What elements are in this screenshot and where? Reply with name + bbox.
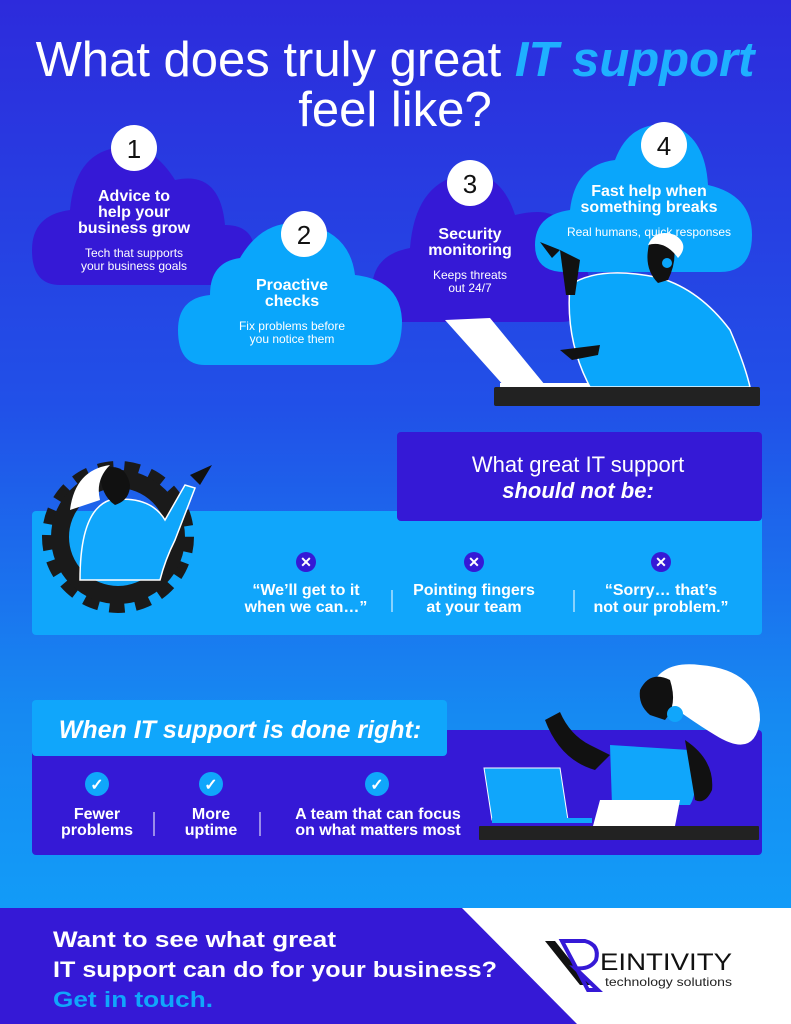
item 2	[413, 552, 535, 616]
title: feel like?	[298, 83, 492, 137]
item 2: Pointing fingers	[413, 582, 535, 599]
illustration: woman with headset	[479, 664, 760, 840]
done right panel	[32, 700, 762, 855]
check 1: Fewer	[74, 806, 120, 823]
cloud 3: security: Keeps threats	[433, 268, 507, 282]
cloud 4: fast help: Real humans, quick responses	[567, 225, 731, 239]
item 1: when we can…”	[244, 599, 367, 616]
check 2	[185, 772, 237, 839]
illustration: support agent at laptop	[445, 233, 760, 406]
light blue band: should not be	[32, 432, 762, 635]
cloud 1: advice: your business goals	[81, 259, 187, 273]
item 3: not our problem.”	[593, 599, 729, 616]
check 3: ✓	[370, 777, 384, 794]
cloud 1: advice	[32, 125, 255, 285]
illustration: gear with person	[53, 465, 212, 602]
cloud 3: security: monitoring	[428, 242, 512, 259]
header box: What great IT support	[472, 452, 684, 477]
cta text	[53, 927, 497, 1012]
cloud 1: advice: business grow	[78, 220, 191, 237]
cloud 3: security: out 24/7	[448, 281, 492, 295]
check 2: ✓	[204, 777, 218, 794]
check 1	[61, 772, 133, 839]
item 3	[593, 552, 729, 616]
item 2: at your team	[426, 599, 522, 616]
item 3: “Sorry… that’s	[605, 582, 717, 599]
item 2: ✕	[468, 554, 480, 570]
cloud 4: fast help: Fast help when	[591, 183, 707, 200]
title: What does truly great IT support	[36, 33, 756, 87]
cloud 1: advice: 1	[127, 134, 141, 164]
title box: When IT support is done right:	[59, 716, 421, 744]
cloud 2: proactive: 2	[297, 220, 311, 250]
cloud 2: proactive	[178, 211, 402, 365]
cloud 1: advice: Advice to	[98, 188, 170, 205]
check 2: More	[192, 806, 230, 823]
item 1: “We’ll get to it	[252, 582, 360, 599]
cloud 1: advice: Tech that supports	[85, 246, 183, 260]
title box	[32, 700, 447, 756]
check 3: on what matters most	[295, 822, 461, 839]
cloud 3: security	[372, 160, 590, 322]
cloud 3: security: 3	[463, 169, 477, 199]
title	[36, 33, 756, 137]
header box: should not be:	[502, 478, 654, 503]
cloud 2: proactive: checks	[265, 293, 319, 310]
cta text: IT support can do for your business?	[53, 957, 497, 982]
cloud 4: fast help: something breaks	[581, 199, 718, 216]
check 3: A team that can focus	[295, 806, 461, 823]
check 1: problems	[61, 822, 133, 839]
logo	[545, 941, 732, 990]
cloud 1: advice: help your	[98, 204, 170, 221]
cloud 2: proactive: Proactive	[256, 277, 328, 294]
check 1: ✓	[90, 777, 104, 794]
cloud 3: security: Security	[438, 226, 502, 243]
cloud 4: fast help	[535, 122, 752, 272]
check 2: uptime	[185, 822, 237, 839]
cloud 4: fast help: 4	[657, 131, 671, 161]
logo: technology solutions	[605, 975, 732, 989]
item 1	[244, 552, 367, 616]
item 1: ✕	[300, 554, 312, 570]
cta text: Get in touch.	[53, 987, 213, 1012]
footer	[0, 908, 791, 1024]
header box	[397, 432, 762, 521]
item 3: ✕	[655, 554, 667, 570]
check 3	[295, 772, 461, 839]
cta text: Want to see what great	[53, 927, 337, 952]
cloud 2: proactive: you notice them	[250, 332, 334, 346]
cloud 2: proactive: Fix problems before	[239, 319, 345, 333]
logo: EINTIVITY	[600, 949, 732, 976]
